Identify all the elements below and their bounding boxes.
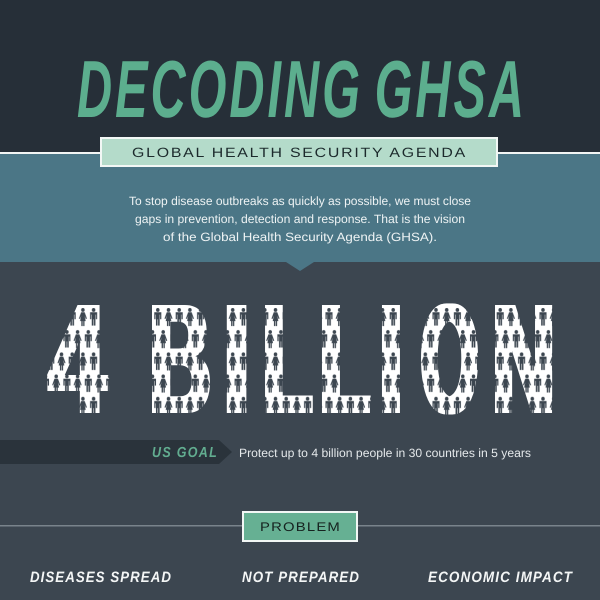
problem: economic impact: ECONOMIC IMPACT (428, 569, 574, 586)
headline: 4 billion made of people (47, 303, 552, 414)
intro text: gaps in prevention, detection and response. That is the vision (135, 212, 465, 226)
intro text (129, 194, 471, 244)
intro text: of the Global Health Security Agenda (GHSA). (163, 230, 437, 244)
problem: not prepared: NOT PREPARED (242, 569, 360, 586)
problem: diseases spread: DISEASES SPREAD (30, 569, 172, 586)
goal arrow bar (0, 440, 232, 464)
panel: intro band (0, 152, 600, 271)
goal text: Protect up to 4 billion people in 30 countries in 5 years (239, 446, 531, 460)
problem label (242, 511, 358, 542)
panel: US goal (0, 440, 531, 464)
goal label: US GOAL (152, 445, 218, 461)
subtitle banner (100, 137, 498, 167)
intro text: To stop disease outbreaks as quickly as possible, we must close (129, 194, 471, 208)
title: DECODING GHSA (77, 45, 527, 135)
problem label: PROBLEM (260, 520, 341, 534)
divider line (0, 525, 600, 526)
panel: title header (0, 0, 600, 152)
problem columns (30, 569, 574, 586)
subtitle banner: GLOBAL HEALTH SECURITY AGENDA (132, 145, 467, 160)
pointer arrow (286, 262, 314, 271)
